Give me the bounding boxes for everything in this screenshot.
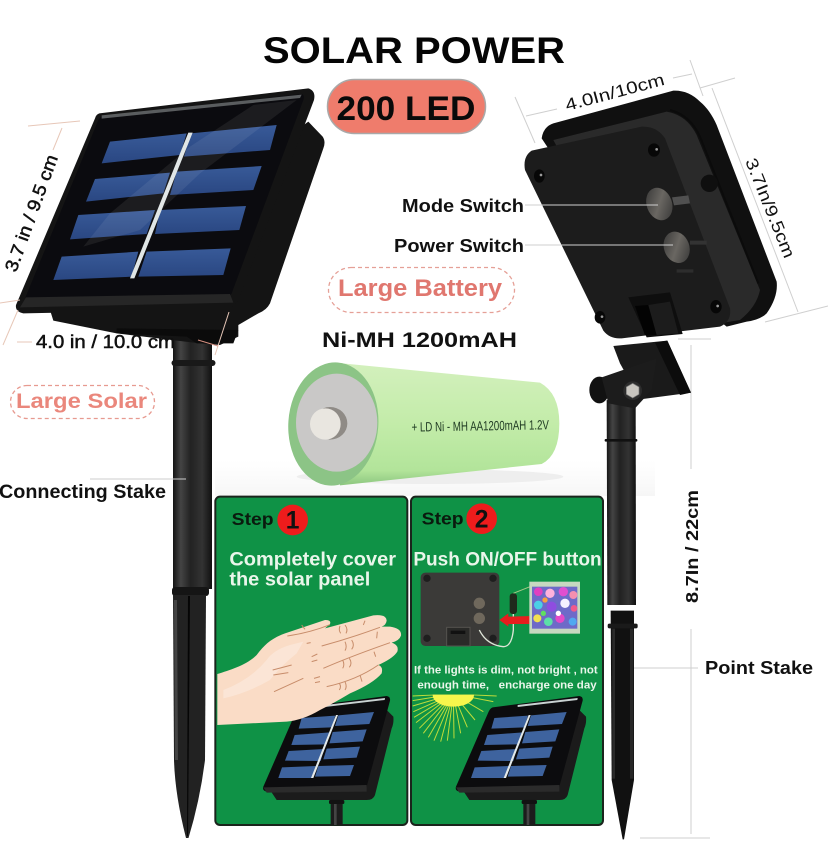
- step 2 heading: Step: [422, 508, 464, 528]
- note about charging: If the lights is dim, not bright , not: [414, 664, 598, 676]
- battery end cap: [284, 359, 383, 489]
- step 1 heading: 1: [286, 508, 300, 535]
- callout: large solar: Large Solar: [16, 389, 148, 413]
- mini solar panel: [263, 696, 393, 825]
- mini solar panel: [456, 696, 586, 825]
- left solar panel: [16, 88, 325, 345]
- step 2 heading: 2: [475, 506, 489, 533]
- label: power switch: Power Switch: [394, 236, 524, 256]
- step 1 heading: Step: [232, 509, 274, 529]
- spike: [611, 611, 634, 839]
- callout: large solar: [10, 386, 154, 418]
- bracket slot: [628, 292, 683, 337]
- panel: step 1: [215, 497, 407, 825]
- icon: housing back with button: [421, 573, 530, 647]
- dimension label: total height: 8.7In / 22cm: [682, 490, 702, 603]
- step 1 instruction: the solar panel: [229, 570, 370, 591]
- panel side housing: [50, 122, 325, 345]
- panel front frame: [16, 88, 314, 313]
- screws: [534, 143, 722, 324]
- label: point stake: Point Stake: [705, 657, 813, 678]
- right dimension lines: [515, 60, 828, 838]
- switch buttons: [642, 184, 677, 224]
- icon: colorful string lights: [529, 582, 580, 634]
- battery body: [335, 363, 559, 485]
- left stake: connecting stake and spike: [172, 337, 216, 838]
- dimension label: panel width: 4.0 in / 10.0 cm: [36, 332, 175, 352]
- step 1 instruction: Completely cover: [229, 549, 397, 570]
- right stake with mount: [589, 341, 691, 839]
- solar cells: [53, 125, 277, 280]
- callout: large battery: Large Battery: [338, 275, 503, 302]
- panel: step 2: [411, 497, 603, 825]
- note about charging: [414, 664, 598, 692]
- battery illustration: [284, 359, 563, 489]
- icon: red arrow: [499, 613, 533, 627]
- dimension label: panel height: 3.7 in / 9.5 cm: [1, 152, 62, 274]
- icon: sun rays: [412, 694, 497, 742]
- step 2 instruction: Push ON/OFF button: [413, 549, 602, 570]
- step panels: [215, 497, 603, 825]
- step 1 heading: [232, 505, 308, 535]
- pole: [607, 400, 636, 605]
- label: battery capacity: Ni-MH 1200mAH: [322, 329, 517, 352]
- note about charging: enough time, encharge one day: [417, 680, 597, 692]
- right housing back view: [525, 91, 777, 338]
- icon: hand covering panel: [217, 615, 401, 725]
- label: connecting stake: Connecting Stake: [0, 482, 166, 503]
- callout: large battery: [328, 268, 514, 312]
- title: SOLAR POWER: [263, 30, 565, 71]
- mount plate: [613, 341, 691, 399]
- battery label: + LD Ni - MH AA1200mAH 1.2V: [411, 417, 549, 435]
- dimension label: housing width: 4.0In/10cm: [563, 70, 667, 115]
- back flange: [542, 91, 777, 327]
- back plate: [525, 127, 730, 338]
- step 1 instruction: [229, 549, 397, 591]
- badge: 200 LED: [328, 80, 486, 134]
- dimension label: housing height: 3.7In/9.5cm: [741, 155, 799, 261]
- pivot: [589, 377, 609, 403]
- label: mode switch: Mode Switch: [402, 196, 524, 216]
- badge: 200 LED: 200 LED: [336, 90, 476, 128]
- step 2 heading: [422, 503, 497, 534]
- left dimension lines: [0, 121, 229, 479]
